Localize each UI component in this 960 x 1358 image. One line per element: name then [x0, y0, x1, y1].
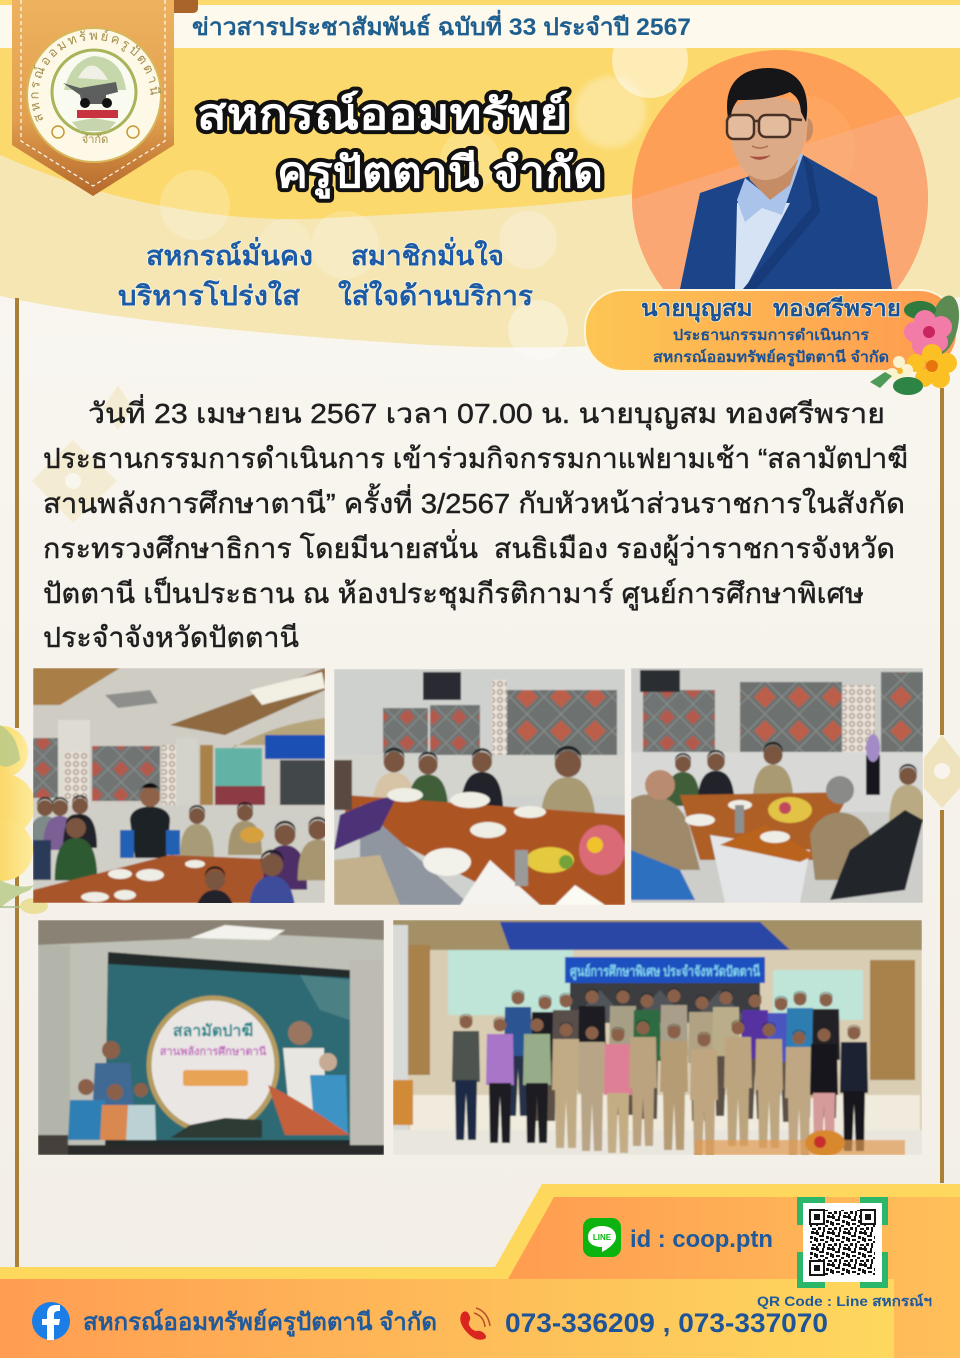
organisation title: ครูปัตตานี จำกัด	[277, 149, 603, 199]
logo: สหกรณ์ออมทรัพย์ครูปัตตานี	[31, 30, 162, 122]
header strip	[0, 5, 960, 48]
flowers on name card	[870, 293, 960, 395]
photo 4: LED screen with event banner	[38, 920, 384, 1155]
footer panel: yellow outline	[0, 1184, 960, 1358]
faint ornament behind text	[32, 385, 133, 523]
slogan	[118, 236, 534, 311]
frame: left gold rule lower	[15, 875, 19, 1267]
slogan: ใส่ใจด้านบริการ	[338, 280, 534, 311]
portrait: chairman	[632, 50, 928, 289]
photo 4: LED screen with event banner: สานพลังการศึกษาตานี	[160, 1045, 267, 1058]
footer panel: bottom bar	[0, 1279, 894, 1358]
header background bands	[0, 0, 960, 360]
body paragraph: วันที่ 23 เมษายน 2567 เวลา 07.00 น. นายบุญสม ทองศรีพราย	[88, 394, 885, 431]
photo 5: group photo on stage: ศูนย์การศึกษาพิเศษ ประจำจังหวัดปัตตานี	[570, 963, 760, 980]
chairman position: ประธานกรรมการดำเนินการ	[673, 326, 870, 344]
photo 5: group photo on stage	[393, 920, 922, 1158]
frame: left gold rule	[15, 298, 19, 728]
organisation title: สหกรณ์ออมทรัพย์	[197, 90, 568, 139]
QR caption: QR Code : Line สหกรณ์ฯ	[757, 1293, 932, 1309]
slogan: บริหารโปร่งใส	[118, 279, 301, 311]
body paragraph: ประจำจังหวัดปัตตานี	[43, 622, 299, 653]
body paragraph	[43, 394, 908, 653]
organisation title: สหกรณ์ออมทรัพย์	[197, 90, 568, 139]
photo 3: four-sided discussion	[631, 668, 927, 903]
name card	[585, 290, 957, 371]
body paragraph: สานพลังการศึกษาตานี” ครั้งที่ 3/2567 กับหัวหน้าส่วนราชการในสังกัด	[43, 483, 905, 519]
QR code	[797, 1197, 888, 1288]
frame: right gold rule upper	[940, 388, 944, 735]
yellow flower at left edge	[0, 725, 48, 914]
body paragraph: ปัตตานี เป็นประธาน ณ ห้องประชุมกีรติกามาร์ ศูนย์การศึกษาพิเศษ	[43, 576, 864, 611]
body paragraph: กระทรวงศึกษาธิการ โดยมีนายสนั่น สนธิเมือง รองผู้ว่าราชการจังหวัด	[43, 529, 895, 566]
organisation title: ครูปัตตานี จำกัด	[277, 149, 603, 199]
footer panel: orange upper tab	[508, 1197, 960, 1358]
faint ornament at right edge	[924, 735, 960, 808]
icon: telephone	[460, 1308, 490, 1340]
icon: Facebook	[32, 1302, 70, 1340]
cooperative name: สหกรณ์ออมทรัพย์ครูปัตตานี จำกัด	[653, 348, 889, 367]
organisation title	[197, 90, 603, 199]
body paragraph: ประธานกรรมการดำเนินการ เข้าร่วมกิจกรรมกาแฟยามเช้า “สลามัตปาฆี	[43, 443, 908, 474]
slogan: สหกรณ์มั่นคง	[146, 236, 313, 271]
photo 2: table with seated officials	[334, 669, 625, 905]
frame: right gold rule lower	[940, 810, 944, 1183]
Facebook page name: สหกรณ์ออมทรัพย์ครูปัตตานี จำกัด	[83, 1308, 437, 1337]
phone numbers: 073-336209 , 073-337070	[505, 1308, 828, 1338]
icon: LINE: LINE	[593, 1233, 612, 1242]
LINE id: id : coop.ptn	[630, 1226, 773, 1253]
photo 4: LED screen with event banner: สลามัตปาฆี	[173, 1021, 253, 1040]
logo: จำกัด	[82, 134, 108, 146]
chairman name: นายบุญสม ทองศรีพราย	[641, 295, 901, 323]
slogan: สมาชิกมั่นใจ	[351, 236, 504, 271]
photo 1: speaker standing in the meeting room	[33, 668, 325, 903]
newsletter issue heading: ข่าวสารประชาสัมพันธ์ ฉบับที่ 33 ประจำปี 2567	[192, 9, 691, 41]
ribbon shield with logo	[12, 0, 198, 196]
icon: LINE	[583, 1218, 621, 1257]
